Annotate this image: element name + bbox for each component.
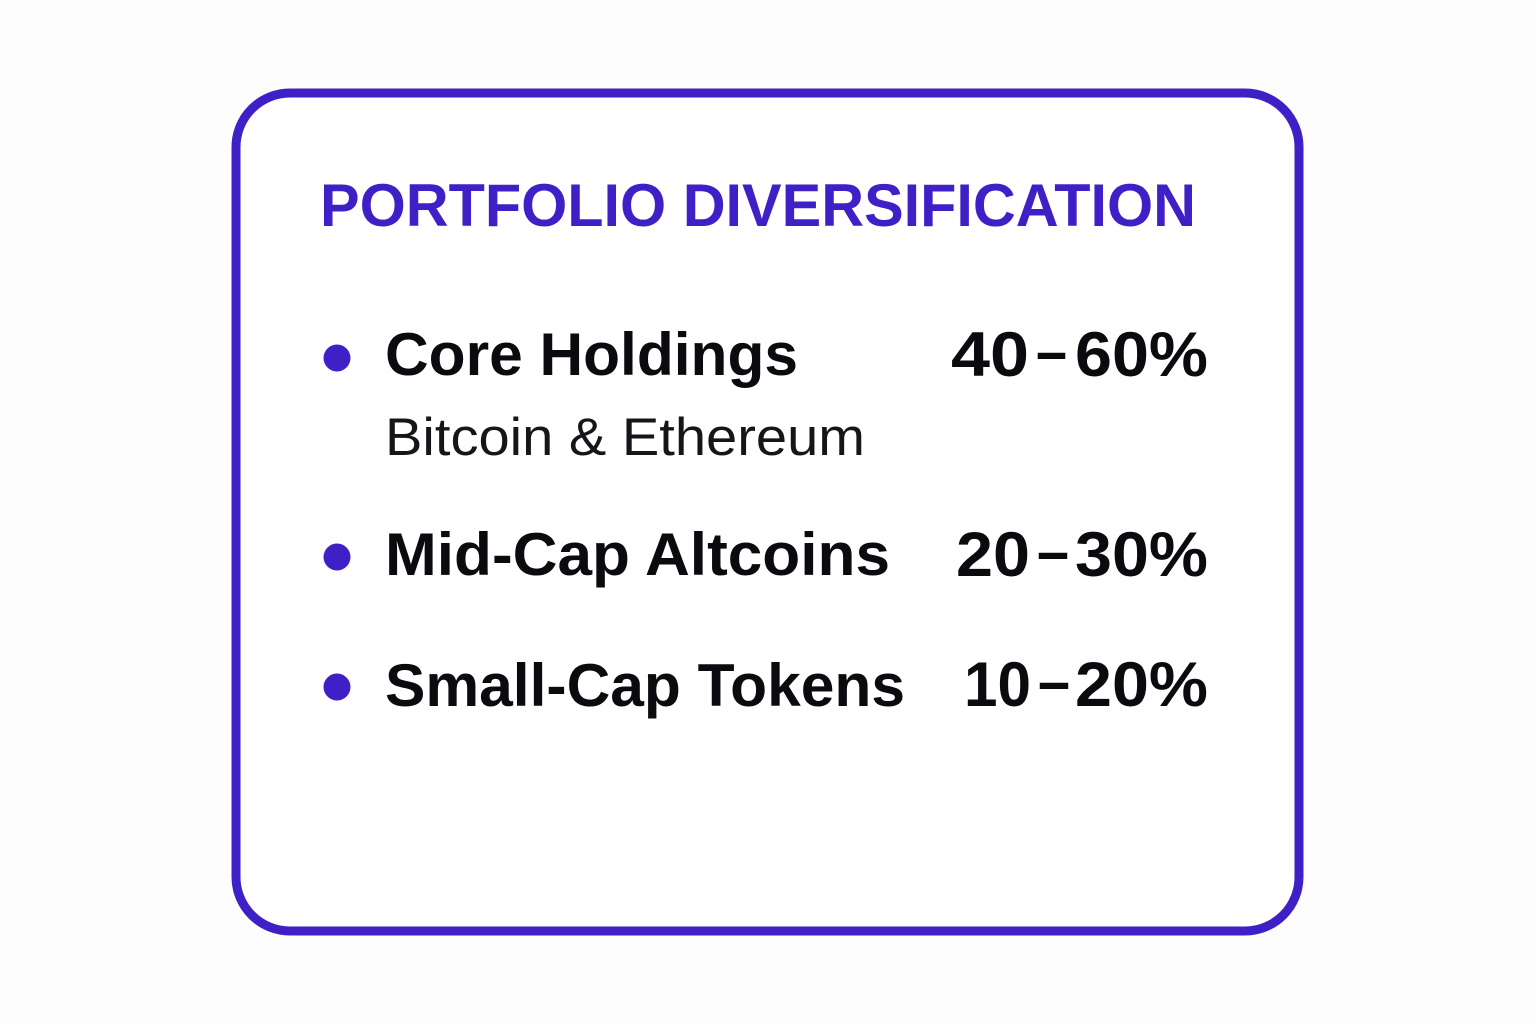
value: core holdings: – xyxy=(1036,317,1067,387)
panel: portfolio diversification xyxy=(236,93,1299,931)
value: mid-cap altcoins xyxy=(956,517,1208,590)
value: mid-cap altcoins: 30% xyxy=(1075,520,1208,590)
bullet: mid-cap altcoins xyxy=(324,544,350,570)
value: mid-cap altcoins: 20 xyxy=(956,520,1030,590)
label: mid-cap altcoins: Mid-Cap Altcoins xyxy=(385,521,890,588)
label: core holdings: Core Holdings xyxy=(385,321,798,388)
value: small-cap tokens: 10 xyxy=(964,650,1031,720)
value: core holdings: 60% xyxy=(1075,320,1208,390)
value: small-cap tokens: 20% xyxy=(1075,650,1208,720)
bullet: small-cap tokens xyxy=(324,674,350,700)
value: mid-cap altcoins: – xyxy=(1037,517,1069,587)
title: PORTFOLIO DIVERSIFICATION xyxy=(320,172,1196,239)
value: small-cap tokens: – xyxy=(1038,647,1070,717)
value: core holdings: 40 xyxy=(951,320,1029,390)
bullet: core holdings xyxy=(324,344,350,372)
value: core holdings xyxy=(951,317,1208,390)
sublabel: bitcoin and ethereum: Bitcoin & Ethereum xyxy=(385,408,865,467)
label: small-cap tokens: Small-Cap Tokens xyxy=(385,652,905,719)
value: small-cap tokens xyxy=(964,647,1208,720)
